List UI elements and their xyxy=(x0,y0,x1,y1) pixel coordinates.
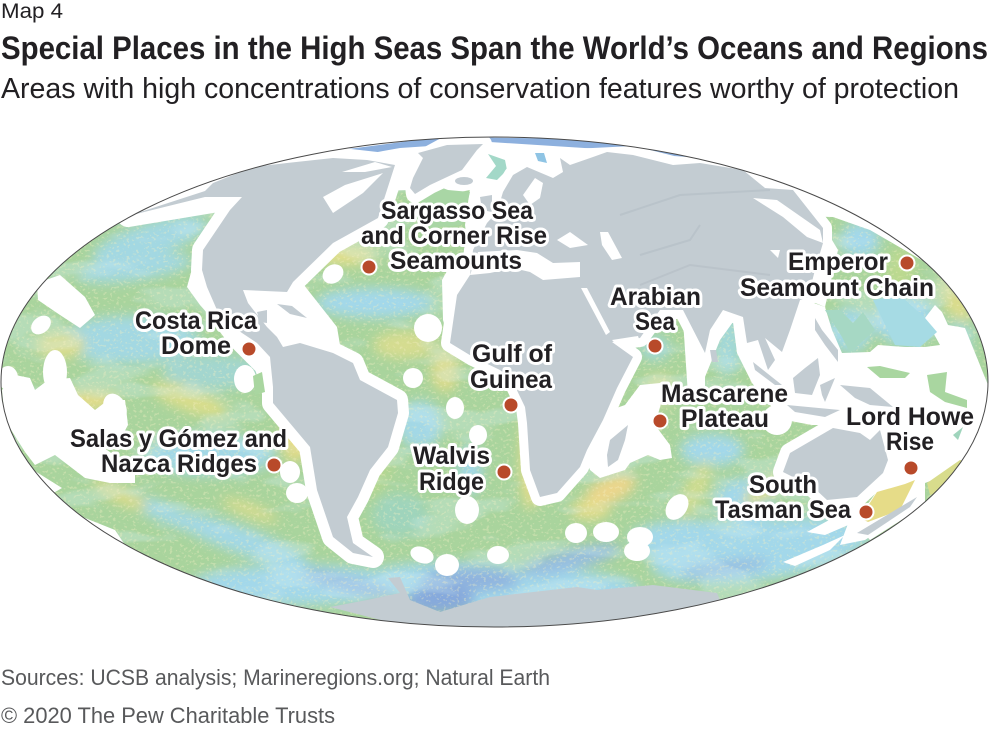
label: Costa Rica Dome xyxy=(135,307,258,360)
arctic white zone xyxy=(347,138,922,260)
label: Gulf of Guinea: Guinea xyxy=(470,366,553,394)
label: South Tasman Sea xyxy=(715,471,874,524)
label: Sargasso Sea and Corner Rise Seamounts: and Corner Rise xyxy=(361,222,547,250)
label: Sargasso Sea and Corner Rise Seamounts xyxy=(361,197,547,275)
label: Lord Howe Rise: Lord Howe xyxy=(846,403,974,431)
label: Walvis Ridge: Walvis xyxy=(413,442,490,470)
inland seas and gulfs xyxy=(323,162,823,346)
label: Emperor Seamount Chain xyxy=(740,248,934,302)
white coastal halo xyxy=(128,144,888,557)
label: Sargasso Sea and Corner Rise Seamounts: Sargasso Sea xyxy=(381,197,534,225)
north atlantic patch xyxy=(418,187,470,228)
label: Gulf of Guinea: Gulf of xyxy=(472,340,553,368)
label: Salas y Gómez and Nazca Ridges: Nazca Ridges xyxy=(101,450,257,478)
barents sea patch xyxy=(486,154,507,180)
label: Mascarene Plateau: Plateau xyxy=(681,405,769,433)
label: Mascarene Plateau: Mascarene xyxy=(661,380,788,408)
arctic blue strips xyxy=(349,138,686,157)
north pacific top patch xyxy=(140,190,175,208)
label: Salas y Gómez and Nazca Ridges xyxy=(70,425,287,478)
subtitle: Areas with high concentrations of conservation features worthy of protection xyxy=(1,73,959,105)
pacific island ocean patches xyxy=(253,366,968,522)
label: Costa Rica Dome: Costa Rica xyxy=(135,307,258,335)
label: Lord Howe Rise xyxy=(846,403,974,476)
label: Arabian Sea xyxy=(610,283,701,354)
label: South Tasman Sea: Tasman Sea xyxy=(715,496,852,524)
label: Arabian Sea: Arabian xyxy=(610,283,701,311)
land masses xyxy=(128,144,917,640)
kara sea patch xyxy=(535,153,547,163)
label: Lord Howe Rise: Rise xyxy=(886,428,934,456)
label: Mascarene Plateau xyxy=(652,380,788,433)
ocean base colour field xyxy=(2,190,988,620)
label: Salas y Gómez and Nazca Ridges: Salas y Gómez and xyxy=(70,425,287,453)
white ocean blobs xyxy=(0,260,792,576)
land surface streaks xyxy=(620,190,770,285)
label: Sargasso Sea and Corner Rise Seamounts: Seamounts xyxy=(390,247,522,275)
ellipse outline xyxy=(1,137,988,627)
white island zones xyxy=(2,225,988,566)
map: world ocean xyxy=(0,130,990,640)
label: Gulf of Guinea xyxy=(470,340,553,412)
label: Costa Rica Dome: Dome xyxy=(161,332,231,360)
label: Emperor Seamount Chain: Emperor xyxy=(788,248,888,276)
copyright: © 2020 The Pew Charitable Trusts xyxy=(1,703,335,728)
northwest pacific patches xyxy=(825,295,937,353)
label: Walvis Ridge: Ridge xyxy=(419,468,484,496)
label: Emperor Seamount Chain: Seamount Chain xyxy=(740,274,934,302)
map label: Map 4: Map 4 xyxy=(1,0,63,23)
east atlantic white margin xyxy=(442,190,483,323)
label: Walvis Ridge xyxy=(413,442,512,496)
label: South Tasman Sea: South xyxy=(749,471,817,499)
label: Arabian Sea: Sea xyxy=(635,308,676,336)
sources: Sources: UCSB analysis; Marineregions.org; Natural Earth xyxy=(1,665,550,690)
